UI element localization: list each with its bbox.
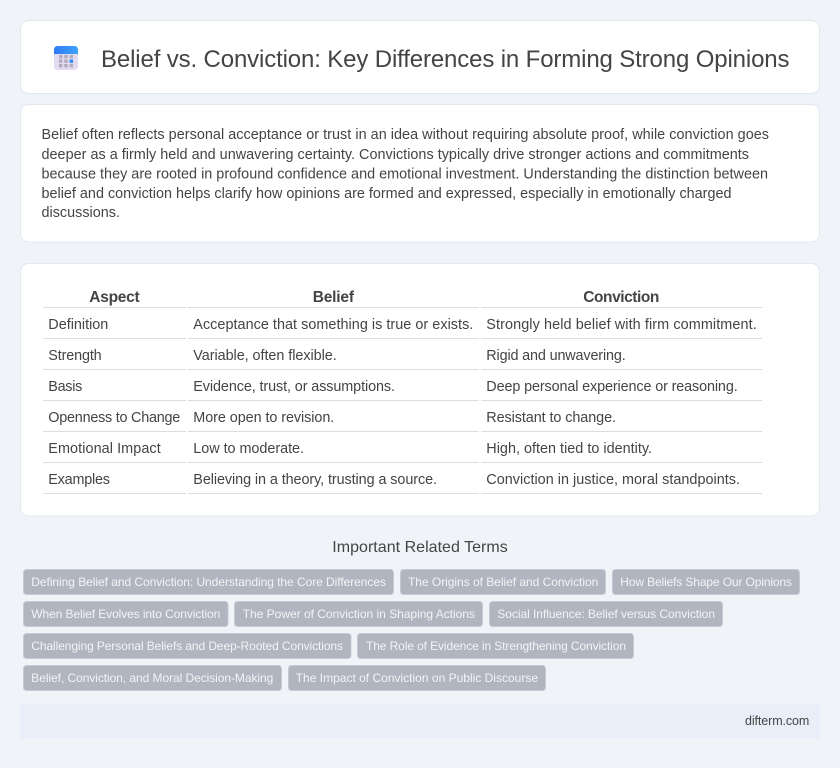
row: basis: [48, 379, 738, 395]
footer: [20, 704, 820, 738]
row: emotional impact: [48, 441, 652, 457]
tag: The Role of Evidence in Strengthening Conviction: [366, 639, 626, 653]
panel: introduction: [20, 104, 820, 242]
row: strength: Strength: [48, 348, 102, 364]
tag: [24, 634, 351, 658]
text block: introduction: [42, 127, 769, 221]
row: emotional impact: High, often tied to identity.: [486, 441, 652, 457]
row: openness to change: Openness to Change: [48, 410, 180, 426]
tag: Social Influence: Belief versus Conviction: [497, 607, 715, 621]
row: openness to change: [48, 410, 616, 426]
text block: introduction: belief and conviction helps clarify how opinions are formed and expressed, especially in emotionally charged: [42, 186, 732, 202]
tag: Defining Belief and Conviction: Understanding the Core Differences: [31, 575, 386, 589]
table rules: [43, 308, 762, 494]
row: basis: Evidence, trust, or assumptions.: [193, 379, 395, 395]
row: basis: Deep personal experience or reasoning.: [486, 379, 738, 395]
tag: [612, 570, 800, 594]
table header row: Belief: [313, 289, 355, 306]
tag: Challenging Personal Beliefs and Deep-Rooted Convictions: [31, 639, 343, 653]
title: Belief vs. Conviction: Key Differences in Forming Strong Opinions: [101, 46, 790, 73]
tag: [24, 570, 394, 594]
row: examples: Conviction in justice, moral standpoints.: [486, 472, 740, 488]
tag: [234, 602, 482, 626]
text block: introduction: deeper as a firmly held and unwavering certainty. Convictions typically drive stronger actions and commitments: [42, 147, 749, 163]
text block: introduction: discussions.: [42, 205, 120, 221]
text block: introduction: because they are rooted in profound confidence and emotional investment. Understanding the distinction between: [42, 166, 768, 182]
tag: How Beliefs Shape Our Opinions: [620, 575, 792, 589]
tag: [24, 602, 228, 626]
row: strength: Rigid and unwavering.: [486, 348, 626, 364]
tag: The Origins of Belief and Conviction: [408, 575, 598, 589]
tag: The Power of Conviction in Shaping Actions: [243, 607, 475, 621]
row: examples: Examples: [48, 472, 110, 488]
tag: When Belief Evolves into Conviction: [31, 607, 220, 621]
row: definition: [48, 317, 757, 333]
tag: The Impact of Conviction on Public Discourse: [296, 671, 538, 685]
row: emotional impact: Emotional Impact: [48, 441, 161, 457]
table header row: Conviction: [583, 289, 659, 306]
panel: header: [20, 20, 820, 94]
row: examples: Believing in a theory, trusting a source.: [193, 472, 437, 488]
row: basis: Basis: [48, 379, 82, 395]
row: strength: Variable, often flexible.: [193, 348, 337, 364]
panel: comparison table: [20, 264, 820, 516]
tag: [490, 602, 722, 626]
row: openness to change: More open to revision.: [193, 410, 334, 426]
row: openness to change: Resistant to change.: [486, 410, 616, 426]
row: definition: Strongly held belief with firm commitment.: [486, 317, 757, 333]
row: examples: [48, 472, 740, 488]
table header row: Aspect: [89, 289, 140, 306]
tag: [358, 634, 634, 658]
tag: [288, 666, 546, 690]
row: strength: [48, 348, 626, 364]
text block: introduction: Belief often reflects personal acceptance or trust in an idea without requiring absolute proof, while conviction goes: [42, 127, 769, 143]
tag: [24, 666, 282, 690]
row: definition: Acceptance that something is true or exists.: [193, 317, 473, 333]
icon: calendar: [54, 46, 78, 70]
row: emotional impact: Low to moderate.: [193, 441, 304, 457]
footer site name: difterm.com: [745, 714, 809, 728]
table header row: [89, 289, 659, 306]
heading: important related terms: Important Related Terms: [332, 539, 508, 556]
tag: Belief, Conviction, and Moral Decision-Making: [31, 671, 273, 685]
panel: related term tags: [24, 570, 800, 690]
row: definition: Definition: [48, 317, 108, 333]
tag: [400, 570, 606, 594]
